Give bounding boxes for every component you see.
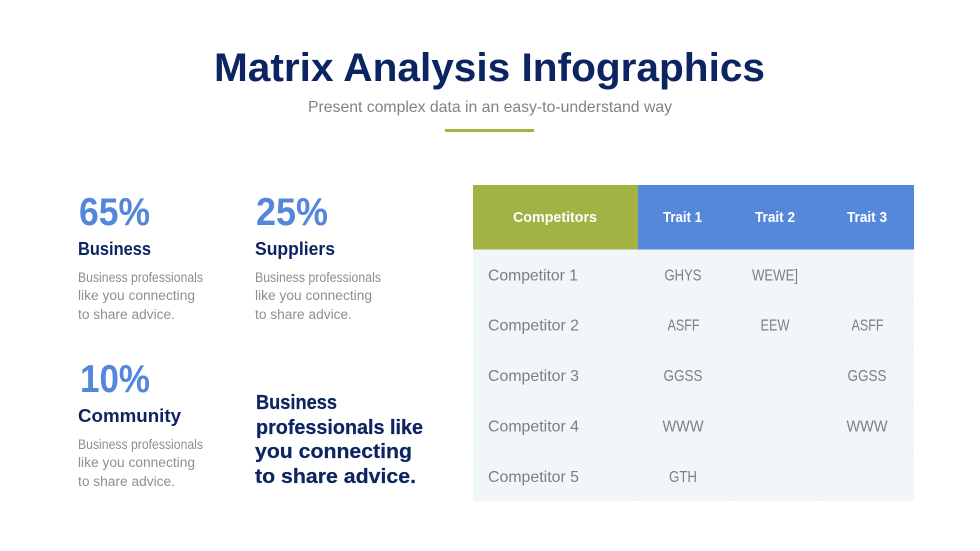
row: competitor 4: WWW (846, 418, 888, 436)
callout statement: Business (256, 392, 337, 414)
row: competitor 4: Competitor 4 (488, 418, 579, 436)
row: competitor 1 (488, 268, 798, 284)
row: competitor 2: ASFF (852, 318, 884, 334)
stat: suppliers (255, 191, 381, 322)
stat: suppliers: 25% (256, 191, 328, 234)
row: competitor 3: Competitor 3 (488, 368, 579, 385)
row: competitor 2: EEW (760, 318, 790, 334)
stat: community: to share advice. (78, 474, 175, 489)
row: competitor 2 (488, 318, 884, 334)
row: competitor 1: Competitor 1 (488, 268, 578, 284)
callout statement: you connecting (255, 441, 412, 463)
stat: community (78, 358, 203, 489)
table body background (473, 249, 914, 501)
stat: suppliers: Suppliers (255, 238, 335, 259)
row: competitor 1: WEWE] (752, 268, 798, 284)
row: competitor 4: WWW (662, 418, 704, 436)
row: competitor 3: GGSS (664, 368, 702, 385)
matrix table (473, 185, 914, 501)
row: competitor 3: GGSS (848, 368, 886, 385)
header: traits (638, 185, 914, 250)
stat: suppliers: like you connecting (255, 288, 372, 303)
stat: community: Community (78, 405, 182, 426)
stat: community: Business professionals (78, 437, 203, 452)
row: competitor 4 (488, 418, 888, 436)
title: Matrix Analysis Infographics (214, 46, 765, 90)
row: competitor 5: Competitor 5 (488, 469, 579, 486)
callout statement: professionals like (256, 417, 423, 439)
row: competitor 5 (488, 469, 697, 486)
header: traits: Trait 1 (663, 209, 702, 226)
header: competitors (473, 185, 638, 250)
stat: business: like you connecting (78, 288, 195, 303)
callout statement (255, 392, 423, 488)
header: competitors: Competitors (513, 209, 597, 226)
stat: business: Business professionals (78, 270, 203, 285)
subtitle: Present complex data in an easy-to-understand way (308, 99, 672, 116)
stat: suppliers: to share advice. (255, 307, 352, 322)
row: competitor 5: GTH (669, 469, 697, 486)
stat: business: Business (78, 238, 151, 259)
stat: suppliers: Business professionals (255, 270, 381, 285)
row: competitor 1: GHYS (664, 268, 702, 284)
row: competitor 3 (488, 368, 886, 385)
row: competitor 2: ASFF (668, 318, 700, 334)
stat: business: 65% (79, 191, 150, 234)
callout statement: to share advice. (255, 466, 416, 488)
stat: business: to share advice. (78, 307, 175, 322)
stat: community: 10% (80, 358, 150, 401)
row: competitor 2: Competitor 2 (488, 318, 579, 334)
accent underline (445, 129, 534, 132)
header: traits: Trait 3 (847, 209, 887, 226)
stat: community: like you connecting (78, 455, 195, 470)
stat: business (78, 191, 203, 322)
header: traits: Trait 2 (755, 209, 795, 226)
